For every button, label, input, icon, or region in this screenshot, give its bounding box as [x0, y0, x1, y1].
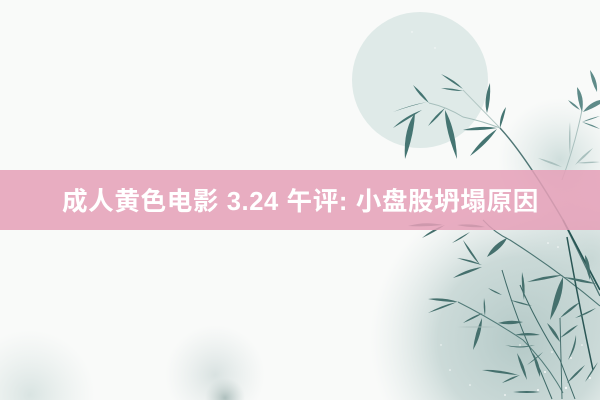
moon: [352, 12, 488, 148]
bamboo: lower branches: [408, 220, 600, 399]
paint speckles: [411, 31, 591, 396]
bamboo: upper right sprig: [538, 70, 600, 180]
bamboo: upper branch: [393, 74, 600, 296]
pink title band: [0, 170, 600, 230]
title: 成人黄色电影 3.24 午评: 小盘股坍塌原因: [62, 188, 539, 216]
